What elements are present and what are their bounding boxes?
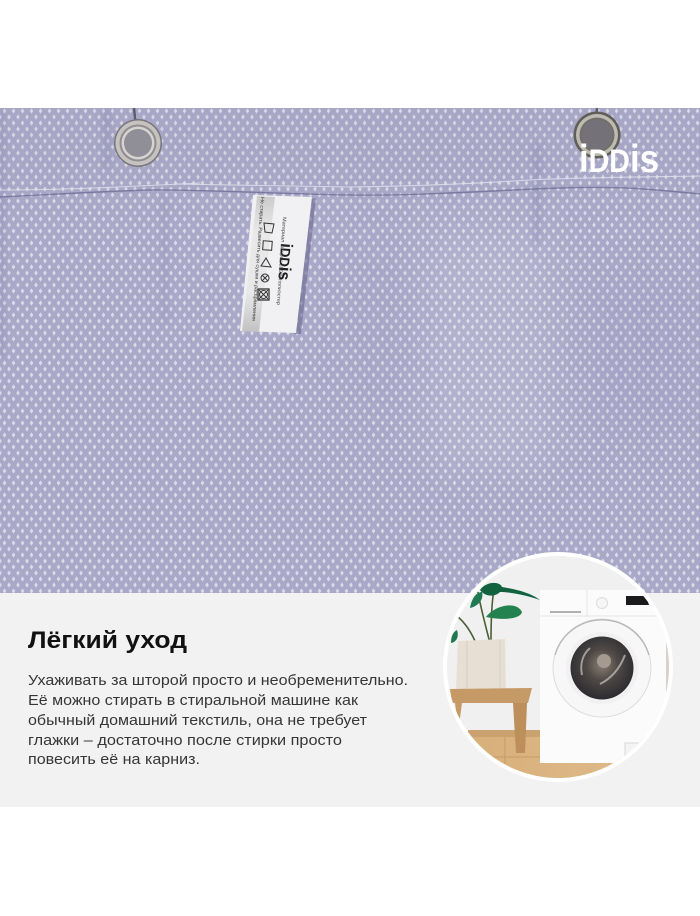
label grey band (242, 196, 275, 332)
label care text: Не стирать. Развесить для сушки и распрямления (250, 197, 265, 321)
icon: right curtain grommet (574, 108, 620, 158)
hem seam (0, 187, 700, 197)
canvas bag (456, 639, 506, 689)
body text block: Ухаживать за шторой просто и необременительно. (28, 672, 408, 689)
body text block: Её можно стирать в стиральной машине как (28, 692, 358, 709)
sewn-in care label (240, 195, 316, 334)
washer control panel (540, 590, 666, 616)
wall (447, 556, 638, 732)
heading: Лёгкий уход (28, 627, 187, 654)
circular photo: washing machine (440, 550, 680, 787)
body text block (28, 672, 408, 768)
body text block: повесить её на карниз. (28, 751, 200, 768)
baseboard (468, 730, 543, 737)
fabric creases (0, 108, 540, 358)
wooden floor (472, 737, 644, 778)
washer door (553, 619, 651, 717)
washer service hatch (624, 742, 639, 756)
plant stems (458, 590, 494, 643)
plant leaves (451, 583, 540, 643)
washing machine body (540, 590, 666, 763)
panel: curtain fabric photo (0, 108, 700, 593)
body text block: глажки – достаточно после стирки просто (28, 732, 342, 749)
body text block: обычный домашний текстиль, она не требует (28, 712, 367, 729)
icon: left curtain grommet (114, 108, 162, 167)
logo: iddis: iDDis (579, 138, 659, 181)
wooden stool (450, 688, 532, 753)
label material text: Материал шторы: 100% полиэстер (275, 217, 287, 305)
label logo: i DDis (274, 243, 296, 281)
panel: grey text band (0, 593, 700, 807)
label care icons (258, 223, 274, 300)
